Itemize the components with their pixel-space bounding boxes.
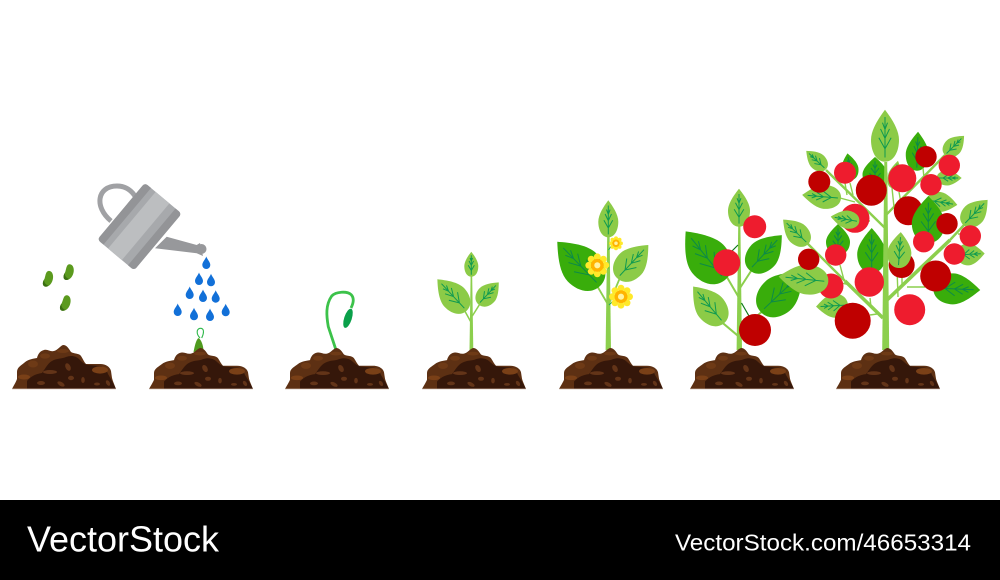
stage 7: mature fruiting plant xyxy=(775,110,996,389)
fruits behind leaves xyxy=(818,196,923,298)
soil mound 3 xyxy=(285,348,389,389)
soil mound 7 xyxy=(836,348,940,389)
soil mound 4 xyxy=(422,348,526,389)
leaves xyxy=(543,200,659,300)
soil mound 2 xyxy=(149,348,253,389)
fruits xyxy=(713,215,771,346)
curved sprout xyxy=(327,292,355,350)
stage 5: flowering plant xyxy=(543,200,663,389)
flowers xyxy=(585,236,633,309)
front leaves xyxy=(775,110,996,297)
stage 4: young plant xyxy=(422,252,526,389)
stem xyxy=(720,226,765,350)
back leaves xyxy=(815,131,985,319)
image url: VectorStock.com/46653314 xyxy=(675,530,971,556)
water drops xyxy=(174,256,230,321)
seeds xyxy=(42,264,75,312)
stage 2: watering can and germinating seed xyxy=(97,183,253,389)
leaves xyxy=(669,189,816,333)
stage 3: seedling xyxy=(285,292,389,389)
brand name: VectorStock xyxy=(27,519,220,560)
stem xyxy=(596,235,621,350)
soil mound 1 xyxy=(12,345,116,389)
stems and branches xyxy=(806,155,964,350)
sprouting seed xyxy=(194,328,204,352)
leaves xyxy=(428,252,506,320)
stem xyxy=(463,276,481,350)
soil mound 6 xyxy=(690,348,794,389)
stage 6: plant with first fruit xyxy=(669,189,816,389)
soil mound 5 xyxy=(559,348,663,389)
footer bar xyxy=(0,500,1000,580)
watering can xyxy=(97,183,206,270)
front fruits xyxy=(798,146,981,339)
stage 1: seeds over soil xyxy=(12,264,116,389)
